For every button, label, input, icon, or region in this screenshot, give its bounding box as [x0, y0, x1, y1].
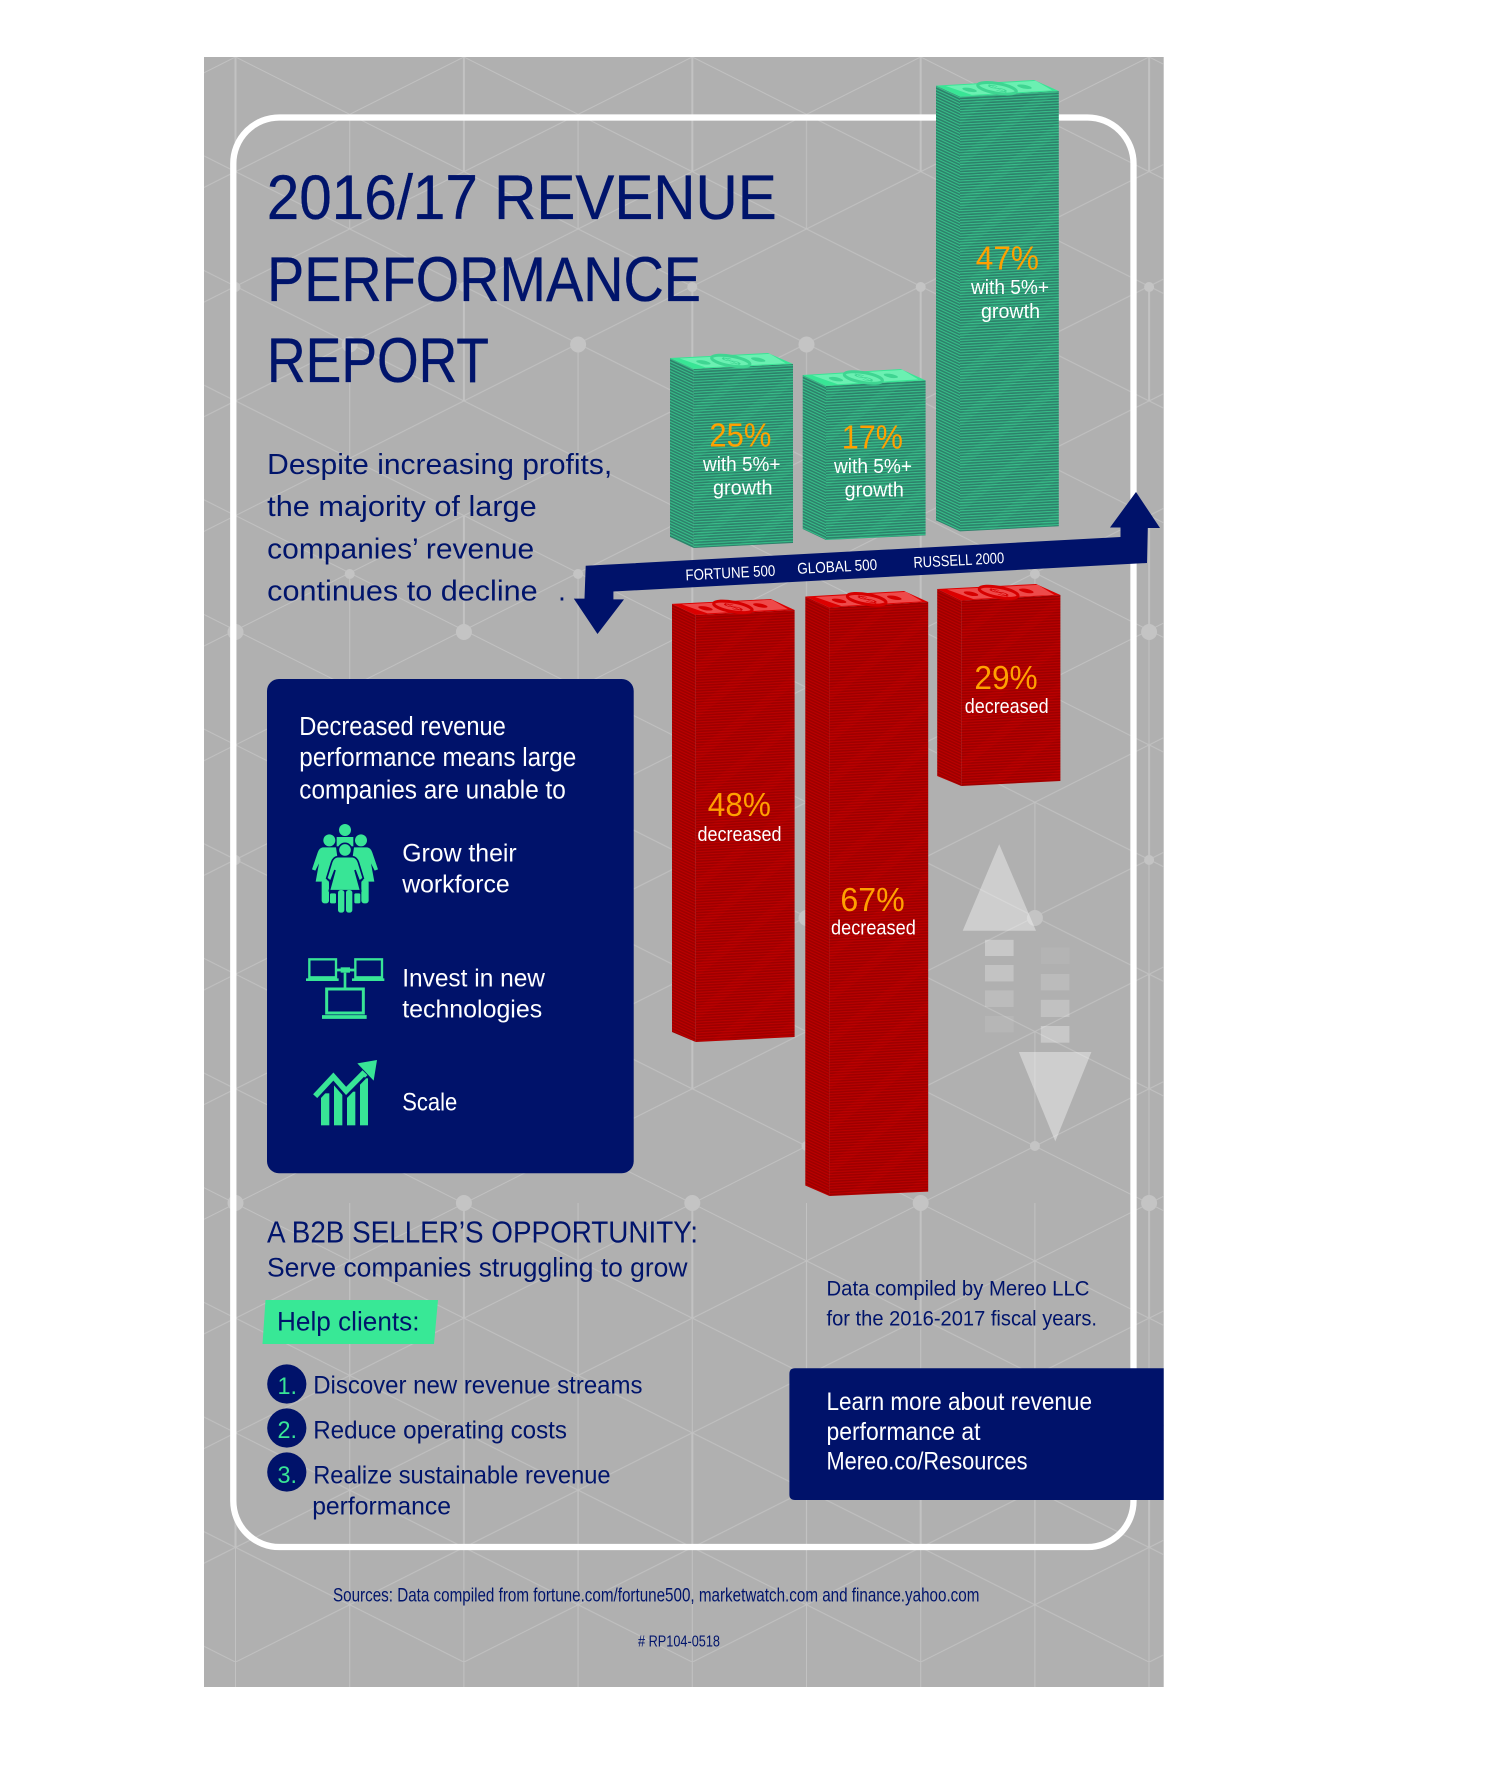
green stack: Fortune 500, 25%: growth [713, 478, 773, 500]
green stack: Russell 2000, 47%: $ [981, 83, 1015, 94]
icon: growth chart [316, 1060, 377, 1125]
panel intro text: companies are unable to [299, 777, 566, 805]
intro text: the majority of large [267, 491, 537, 523]
arrow band with index labels: FORTUNE 500 [685, 563, 776, 584]
panel: call to action: Mereo.co/Resources [826, 1447, 1028, 1475]
red stack: Fortune 500, 48%: $ [717, 602, 751, 613]
green stack: Russell 2000, 47%: with 5%+ [970, 277, 1049, 299]
green stack: Fortune 500, 25% [670, 353, 793, 548]
green stack: Russell 2000, 47%: 47% [976, 239, 1039, 276]
intro text: . [558, 576, 566, 608]
green stack: Global 500, 17% [803, 369, 926, 540]
label: invest in technologies: technologies [402, 996, 542, 1024]
red stack: Global 500, 67% [805, 591, 929, 1196]
white rounded frame [233, 118, 1134, 1547]
green stack: Global 500, 17%: with 5%+ [833, 456, 912, 478]
list item 2: Reduce operating costs [313, 1416, 567, 1444]
red stack: Russell 2000, 29%: 29% [974, 659, 1038, 696]
panel intro text: Decreased revenue [299, 713, 506, 741]
green stack: Russell 2000, 47%: growth [981, 301, 1040, 323]
green stack: Russell 2000, 47% [936, 80, 1059, 531]
red stack: Fortune 500, 48%: decreased [698, 824, 782, 846]
green stack: Global 500, 17%: 17% [842, 418, 903, 455]
panel: gray background with lattice [204, 57, 1164, 1687]
red stack: Fortune 500, 48%: 48% [708, 786, 771, 823]
label: invest in technologies [402, 965, 546, 1024]
panel intro text [299, 713, 576, 805]
intro text: companies’ revenue [267, 534, 534, 566]
panel: call to action [789, 1368, 1164, 1500]
green stack: Fortune 500, 25%: $ [715, 356, 749, 367]
list item 2 [267, 1408, 567, 1448]
data note [826, 1277, 1097, 1331]
list item 1: Discover new revenue streams [313, 1371, 642, 1399]
arrow band with index labels: RUSSELL 2000 [913, 550, 1005, 572]
section heading: B2B opportunity: A B2B SELLER’S OPPORTUNITY: [267, 1216, 698, 1250]
intro text: Despite increasing profits, [267, 449, 612, 481]
red stack: Russell 2000, 29%: decreased [965, 696, 1049, 718]
red stack: Global 500, 67%: 67% [840, 881, 905, 918]
label: grow workforce: Grow their [402, 840, 517, 868]
green stack: Global 500, 17%: $ [848, 372, 881, 384]
data note: for the 2016-2017 fiscal years. [826, 1307, 1097, 1331]
reference code: # RP104-0518 [638, 1634, 720, 1651]
panel: call to action: performance at [826, 1418, 981, 1446]
section heading: B2B opportunity: Serve companies struggling to grow [267, 1253, 688, 1283]
label: grow workforce: workforce [401, 871, 510, 899]
section heading: B2B opportunity [267, 1216, 698, 1283]
sources line: Sources: Data compiled from fortune.com/fortune500, marketwatch.com and finance.yahoo.com [333, 1586, 979, 1607]
title [267, 163, 777, 396]
green stack: Fortune 500, 25%: 25% [709, 416, 771, 453]
title: PERFORMANCE [267, 245, 701, 315]
red stack: Global 500, 67%: decreased [831, 918, 916, 940]
green label: help clients [262, 1300, 438, 1344]
list item 3: Realize sustainable revenue [313, 1461, 611, 1489]
title: REPORT [267, 326, 489, 396]
list item 3 [267, 1452, 611, 1520]
red stack: Fortune 500, 48% [672, 599, 795, 1042]
red stack: Global 500, 67%: $ [851, 594, 885, 605]
list item 2: 2. [278, 1417, 297, 1444]
label: grow workforce [401, 840, 517, 899]
arrow band with index labels [574, 492, 1160, 634]
icon: up arrow with fading dashes [963, 844, 1036, 1032]
label: scale: Scale [402, 1088, 457, 1116]
icon: down arrow with fading dashes [1019, 948, 1091, 1141]
numbered list [267, 1364, 642, 1520]
panel intro text: performance means large [299, 744, 576, 772]
icon: networked laptops [306, 959, 384, 1017]
intro text [267, 449, 612, 608]
green stack: Fortune 500, 25%: with 5%+ [702, 454, 780, 476]
red stack: Russell 2000, 29% [937, 584, 1061, 786]
list item 3: performance [312, 1492, 451, 1520]
green label: help clients: Help clients: [277, 1307, 420, 1337]
list item 1 [267, 1364, 642, 1404]
red stack: Russell 2000, 29%: $ [983, 587, 1017, 599]
list item 1: 1. [278, 1373, 297, 1400]
list item 3: 3. [278, 1462, 297, 1489]
intro text: continues to decline [267, 576, 538, 608]
label: invest in technologies: Invest in new [402, 965, 546, 993]
green stack: Global 500, 17%: growth [845, 480, 904, 502]
panel: call to action: Learn more about revenue [826, 1388, 1092, 1416]
icon: people group [312, 824, 378, 913]
title: 2016/17 REVENUE [267, 163, 777, 233]
data note: Data compiled by Mereo LLC [826, 1277, 1089, 1301]
panel: decreased revenue consequences [267, 679, 634, 1173]
arrow band with index labels: GLOBAL 500 [797, 557, 878, 578]
